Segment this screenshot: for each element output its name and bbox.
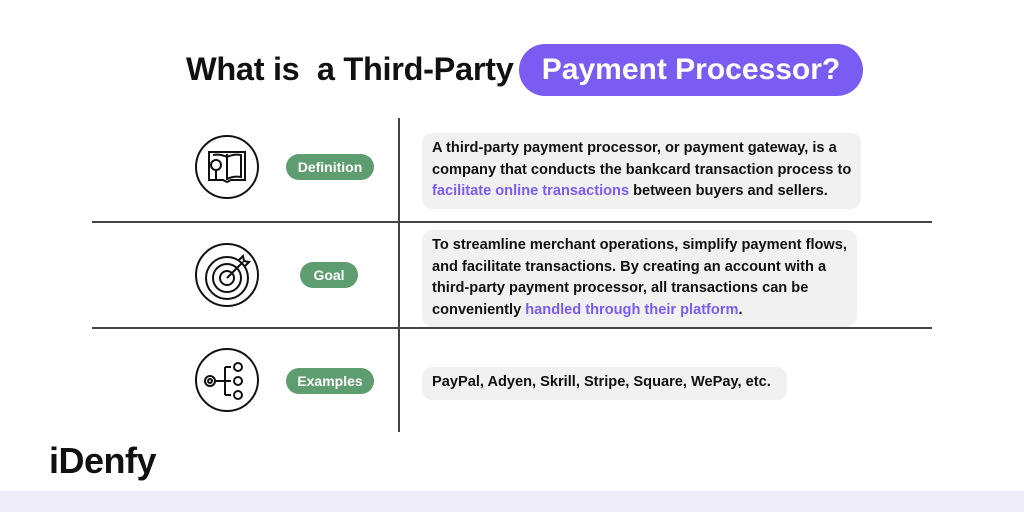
tag: examples [286, 368, 374, 394]
text: goal: To streamline merchant operations, simplify payment flows, [432, 237, 847, 253]
text: definition [422, 133, 861, 208]
icon: network [195, 348, 259, 412]
logo: iDenfy [49, 440, 156, 481]
tag: goal [300, 262, 358, 288]
icon: book with magnifier [195, 135, 259, 199]
text: definition: A third-party payment processor, or payment gateway, is a [432, 140, 837, 156]
text: definition: company that conducts the bankcard transaction process to [432, 162, 851, 178]
title pill: Payment Processor? [542, 53, 840, 86]
title pill [519, 44, 863, 96]
tag: goal: Goal [313, 267, 345, 283]
text: definition: facilitate online transactions between buyers and sellers. [432, 183, 828, 199]
text: examples [422, 367, 787, 400]
title: What is a Third-Party [186, 51, 513, 87]
tag: examples: Examples [297, 373, 363, 389]
tag: definition: Definition [298, 159, 362, 175]
text: goal [422, 230, 857, 327]
tag: definition [286, 154, 374, 180]
text: goal: third-party payment processor, all transactions can be [432, 280, 808, 296]
bottom band [0, 491, 1024, 512]
icon: target [195, 243, 259, 307]
text: goal: and facilitate transactions. By creating an account with a [432, 258, 826, 274]
text: goal: conveniently handled through their platform. [432, 302, 743, 318]
text: examples: PayPal, Adyen, Skrill, Stripe, Square, WePay, etc. [432, 374, 771, 390]
